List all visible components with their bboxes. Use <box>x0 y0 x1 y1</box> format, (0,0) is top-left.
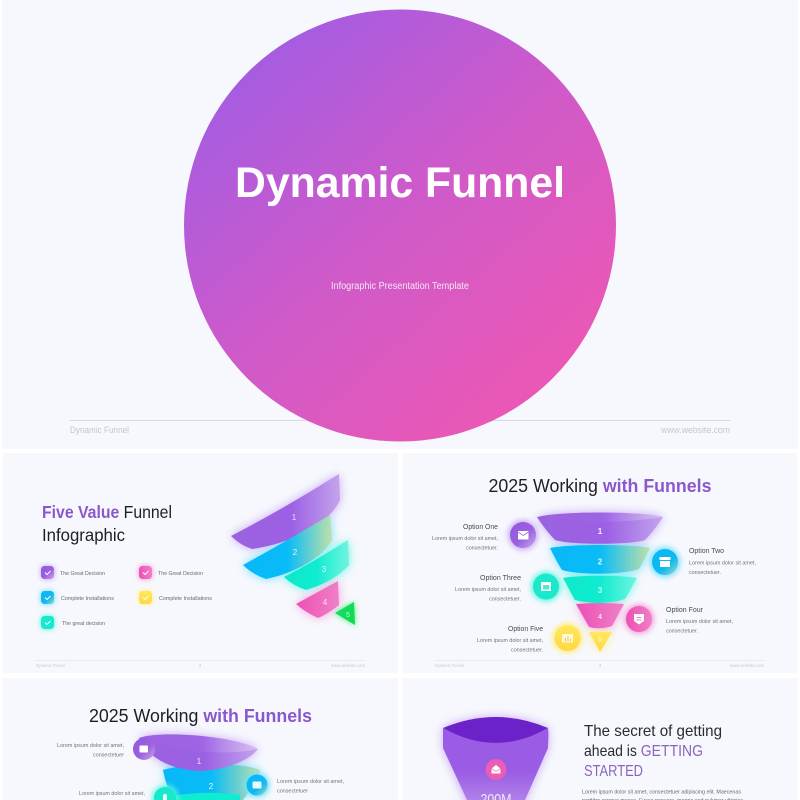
callout right: consectetuer <box>277 788 308 794</box>
funnel segment 5 <box>589 632 612 652</box>
gradient circle <box>184 10 616 442</box>
funnel piece 5 <box>335 602 355 625</box>
funnel piece 2 <box>243 515 332 579</box>
icon: envelope circle <box>508 520 538 550</box>
icon: box circle <box>650 547 680 577</box>
icon: card circle right <box>244 772 270 798</box>
option one: Lorem ipsum dolor sit amet, <box>432 536 498 542</box>
callout left <box>57 743 124 756</box>
option three: Option Three <box>480 575 521 582</box>
funnel segment 3 <box>563 576 637 603</box>
footer: 3 <box>599 663 602 668</box>
heading: Five Value Funnel <box>42 502 172 522</box>
tilted funnel <box>231 474 355 625</box>
option four <box>666 607 733 634</box>
legend <box>41 566 212 629</box>
funnel piece 3: 3 <box>322 565 327 574</box>
panel: five value funnel <box>3 453 398 673</box>
heading <box>584 723 722 780</box>
legend: The Great Decision <box>60 571 105 577</box>
footer: Dynamic Funnel <box>36 663 65 668</box>
heading: The secret of getting <box>584 723 722 740</box>
heading: ahead is GETTING <box>584 743 703 760</box>
footer left text: Dynamic Funnel <box>70 425 129 435</box>
tilted segment 2 <box>163 764 260 800</box>
legend: Complete Installations <box>159 596 212 602</box>
option one: Option One <box>463 524 498 531</box>
heading line two: Infographic <box>42 525 125 545</box>
heading: 2025 Working with Funnels <box>488 475 712 496</box>
funnel segment 5: 5 <box>598 637 602 643</box>
option five: consectetuer. <box>511 648 543 654</box>
footer line <box>70 420 730 421</box>
funnel piece 1 <box>231 474 340 549</box>
option three <box>455 575 521 602</box>
body text: Lorem ipsum dolor sit amet, consectetuer adipiscing elit. Maecenas <box>582 790 741 796</box>
icon: calendar circle <box>531 572 561 602</box>
option three: consectetuer. <box>489 596 521 602</box>
option four: consectetuer. <box>666 628 698 634</box>
callout left: consectetuer <box>93 752 124 758</box>
panel: title slide <box>2 0 798 449</box>
panel: secret of getting ahead <box>431 705 743 800</box>
heading: 2025 Working with Funnels <box>89 705 312 726</box>
funnel segment 1 <box>537 512 663 544</box>
option two: consectetuer. <box>689 570 721 576</box>
panel: 2025 working with funnels, vertical <box>403 453 797 673</box>
legend: The great decision <box>62 621 105 627</box>
tilted segment 3 <box>172 793 240 800</box>
funnel piece 5: 5 <box>346 612 350 619</box>
option one: consectetuer. <box>466 546 498 552</box>
option five: Lorem ipsum dolor sit amet, <box>477 638 543 644</box>
footer right text: www.website.com <box>660 425 730 435</box>
tilted segment 1 <box>139 734 258 771</box>
footer <box>435 660 764 668</box>
funnel glow <box>139 734 260 800</box>
funnel glow <box>537 512 663 652</box>
legend: The Great Decision <box>158 571 203 577</box>
funnel shape <box>443 717 548 800</box>
option three: Lorem ipsum dolor sit amet, <box>455 587 521 593</box>
funnel segment 2: 2 <box>598 558 603 566</box>
funnel piece 4: 4 <box>323 598 328 607</box>
option two: Option Two <box>689 548 724 555</box>
callout right <box>277 779 344 792</box>
body text <box>582 790 743 800</box>
funnel piece 4 <box>296 581 339 618</box>
panel: 2025 working with funnels, tilted <box>57 708 344 800</box>
option one <box>432 524 498 552</box>
option five <box>477 626 543 654</box>
option four: Lorem ipsum dolor sit amet, <box>666 619 733 625</box>
footer <box>36 660 365 668</box>
funnel segment 4: 4 <box>598 614 602 621</box>
footer: 2 <box>199 663 202 668</box>
funnel piece 3 <box>284 540 349 590</box>
footer: Dynamic Funnel <box>435 663 464 668</box>
icon: badge circle <box>624 604 654 634</box>
subtitle: Infographic Presentation Template <box>331 281 469 292</box>
funnel segment 2 <box>550 545 650 574</box>
legend: Complete Installations <box>61 596 114 602</box>
option two <box>689 548 756 576</box>
tilted segment 2: 2 <box>209 782 214 791</box>
tilted segment 1: 1 <box>197 757 202 766</box>
funnel segment 1: 1 <box>598 526 603 536</box>
funnel segment 4 <box>576 603 624 628</box>
funnel piece 1: 1 <box>292 513 297 522</box>
option two: Lorem ipsum dolor sit amet, <box>689 560 756 566</box>
callout left: Lorem ipsum dolor sit amet, <box>57 743 124 749</box>
icon: pink mail circle <box>486 759 506 780</box>
callout lower left: Lorem ipsum dolor sit amet, <box>79 791 145 797</box>
footer: www.website.com <box>730 663 764 668</box>
icon: teal circle <box>152 785 178 800</box>
footer: www.website.com <box>331 663 365 668</box>
option four: Option Four <box>666 607 704 614</box>
heading: STARTED <box>584 763 643 780</box>
option five: Option Five <box>508 626 543 633</box>
main title: Dynamic Funnel <box>235 159 565 207</box>
funnel segment 3: 3 <box>598 586 603 595</box>
icon: chart circle <box>552 623 582 653</box>
funnel piece 2: 2 <box>293 548 298 557</box>
icon: card circle left <box>133 738 155 760</box>
callout right: Lorem ipsum dolor sit amet, <box>277 779 344 785</box>
